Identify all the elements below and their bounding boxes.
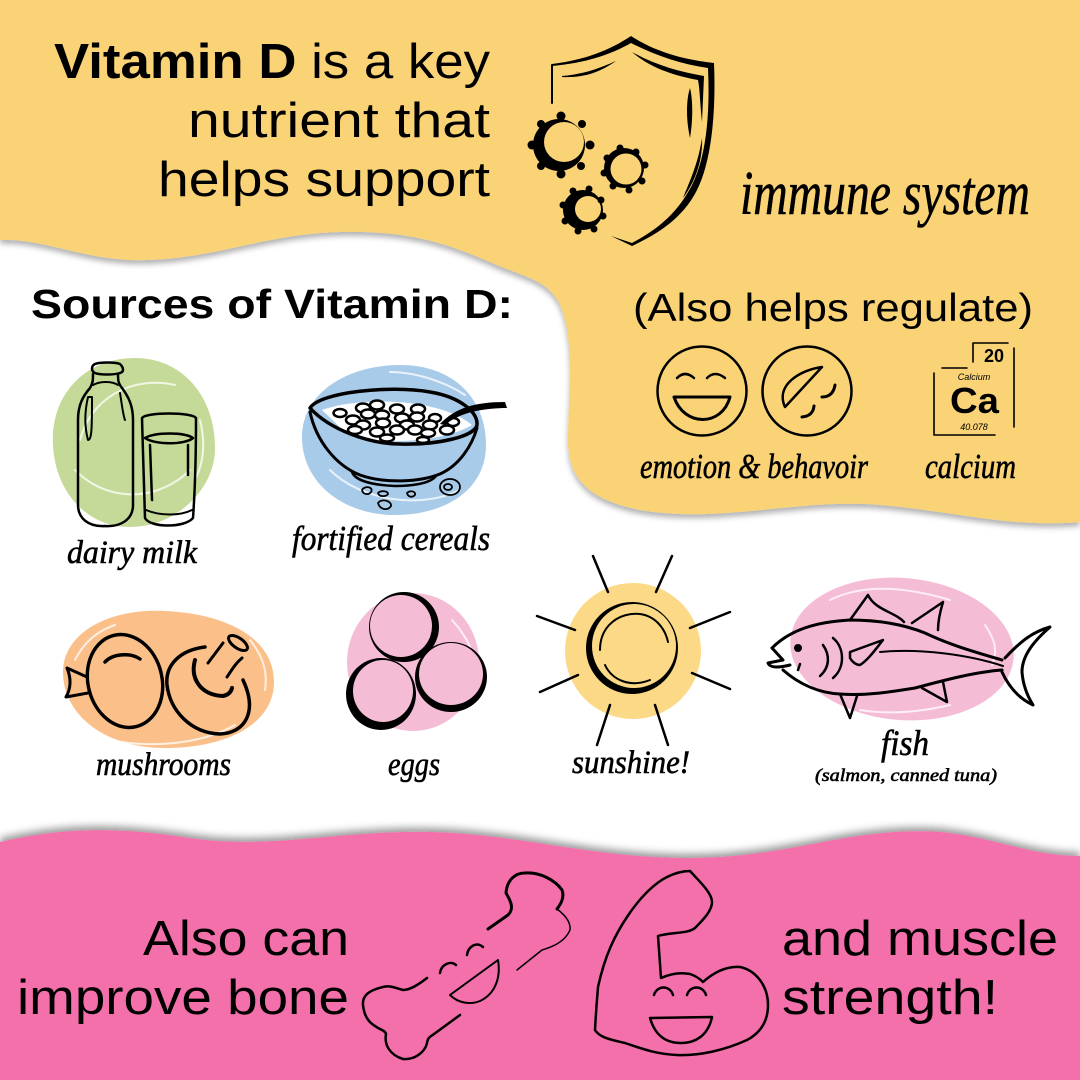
icon: virus small xyxy=(560,186,606,234)
icon: shield with viruses xyxy=(528,36,714,246)
text: also can improve bone xyxy=(17,912,349,1025)
icon: calcium element tile: Calcium xyxy=(958,372,991,382)
text: and muscle strength xyxy=(782,912,1058,1025)
panel: yellow immune system banner xyxy=(0,0,1080,523)
label: emotion and behavior: emotion & behavoir xyxy=(640,447,868,486)
label: eggs: eggs xyxy=(388,747,440,783)
title: vitamin D intro xyxy=(54,35,491,207)
icon: calcium element tile: Ca xyxy=(950,380,1000,421)
source: fortified cereals xyxy=(292,365,507,558)
source: fish xyxy=(768,569,1050,786)
label: mushrooms: mushrooms xyxy=(96,747,231,783)
icon: behavior face xyxy=(762,346,852,436)
source: mushrooms xyxy=(63,611,274,783)
source: dairy milk xyxy=(53,358,215,571)
heading: sources of vitamin D: Sources of Vitamin D: xyxy=(31,281,513,327)
icon: smiling bone xyxy=(363,873,570,1059)
label: fortified cereals: fortified cereals xyxy=(292,519,490,558)
title: vitamin D intro: nutrient that xyxy=(188,94,490,148)
title: vitamin D intro: helps support xyxy=(158,153,490,207)
icon: virus medium xyxy=(600,144,648,194)
icon: calcium element tile: 40.078 xyxy=(960,422,988,432)
label: calcium: calcium xyxy=(925,447,1016,486)
label: salmon and canned tuna: (salmon, canned tuna) xyxy=(815,765,997,786)
source: eggs xyxy=(346,592,487,783)
text: and muscle strength: strength! xyxy=(782,971,998,1025)
source: sunshine xyxy=(537,556,730,781)
icon: calcium element tile: 20 xyxy=(984,346,1004,366)
icon: virus large xyxy=(528,112,594,178)
icon: smiling muscle xyxy=(595,871,768,1055)
text: also can improve bone: Also can xyxy=(143,912,349,966)
label: dairy milk: dairy milk xyxy=(67,535,198,571)
label: fish: fish xyxy=(881,723,929,763)
text: and muscle strength: and muscle xyxy=(782,912,1058,966)
panel: pink strength banner xyxy=(0,830,1080,1080)
text: also helps regulate: (Also helps regulate) xyxy=(633,287,1033,330)
icon: smiling face xyxy=(658,346,746,436)
icon: calcium element tile xyxy=(934,343,1014,435)
text: also can improve bone: improve bone xyxy=(17,971,349,1025)
label: sunshine: sunshine! xyxy=(572,745,690,781)
title: vitamin D intro: Vitamin D is a key xyxy=(54,35,491,89)
